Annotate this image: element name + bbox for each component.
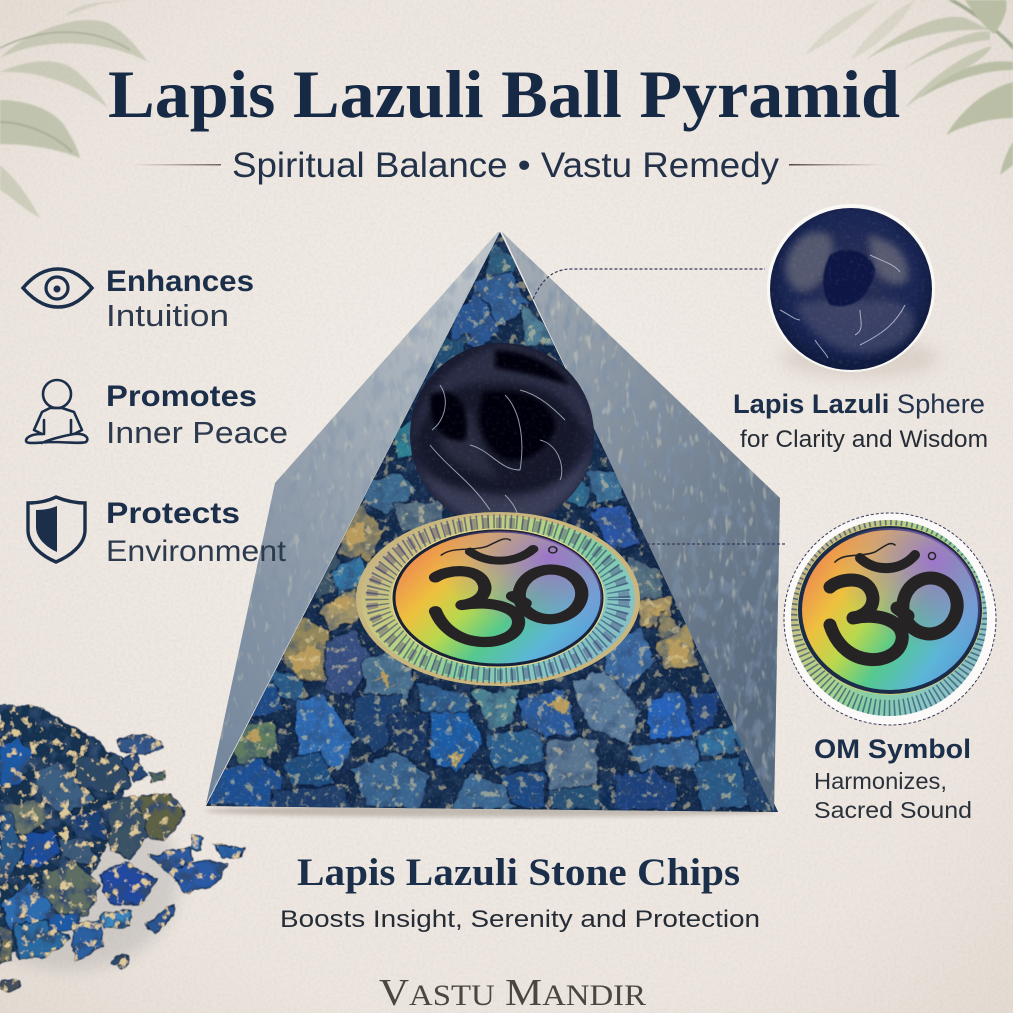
left flap [200,230,510,810]
icon: eye [23,269,92,307]
benefit: protects environment [28,497,287,568]
benefit: promotes inner peace: Promotes [106,380,257,413]
OM disc [356,512,640,686]
stone shading [200,230,780,820]
icon: meditating person [26,380,87,443]
benefit: promotes inner peace [26,380,288,450]
stone speckle [200,230,780,820]
caption: lapis lazuli sphere [733,389,988,453]
benefit: enhances intuition: Intuition [106,298,229,333]
caption: OM symbol [814,734,972,823]
inset: lapis sphere [767,204,940,378]
connector: OM callout [637,543,786,545]
benefit: enhances intuition: Enhances [106,265,254,298]
gold flecks [247,520,692,768]
caption: lapis lazuli sphere: Lapis Lazuli Sphere [733,389,985,419]
benefit: promotes inner peace: Inner Peace [106,415,288,450]
pyramid shadow [205,805,775,817]
sphere on pyramid [410,343,594,525]
right flap [500,230,790,815]
subtitle with rules: Spiritual Balance • Vastu Remedy [232,146,780,185]
caption: OM symbol: Harmonizes, [814,768,947,794]
connector: sphere callout [533,269,765,299]
pyramid [200,230,790,820]
caption: stone chips: Lapis Lazuli Stone Chips [297,851,740,894]
palm leaves: top left [0,0,148,218]
OM glyph drawing [435,539,591,642]
caption: OM symbol: Sacred Sound [814,797,972,823]
benefit: enhances intuition [23,265,254,333]
gold noise [200,230,780,820]
palm leaves: top right [805,0,1013,175]
inset: OM symbol [784,513,996,725]
OM glyph drawing [830,544,965,660]
caption: stone chips: Boosts Insight, Serenity and Protection [280,906,760,933]
chip pile [0,706,245,991]
title: Lapis Lazuli Ball Pyramid [108,56,900,132]
icon: shield [28,497,85,562]
caption: lapis lazuli sphere: for Clarity and Wisdom [740,426,988,453]
brand name: VASTU MANDIR [379,972,646,1013]
caption: OM symbol: OM Symbol [814,734,971,764]
pyramid interior stones [200,230,780,820]
caption: stone chips [280,851,760,933]
benefit: protects environment: Protects [106,497,240,530]
benefit: protects environment: Environment [106,535,287,568]
